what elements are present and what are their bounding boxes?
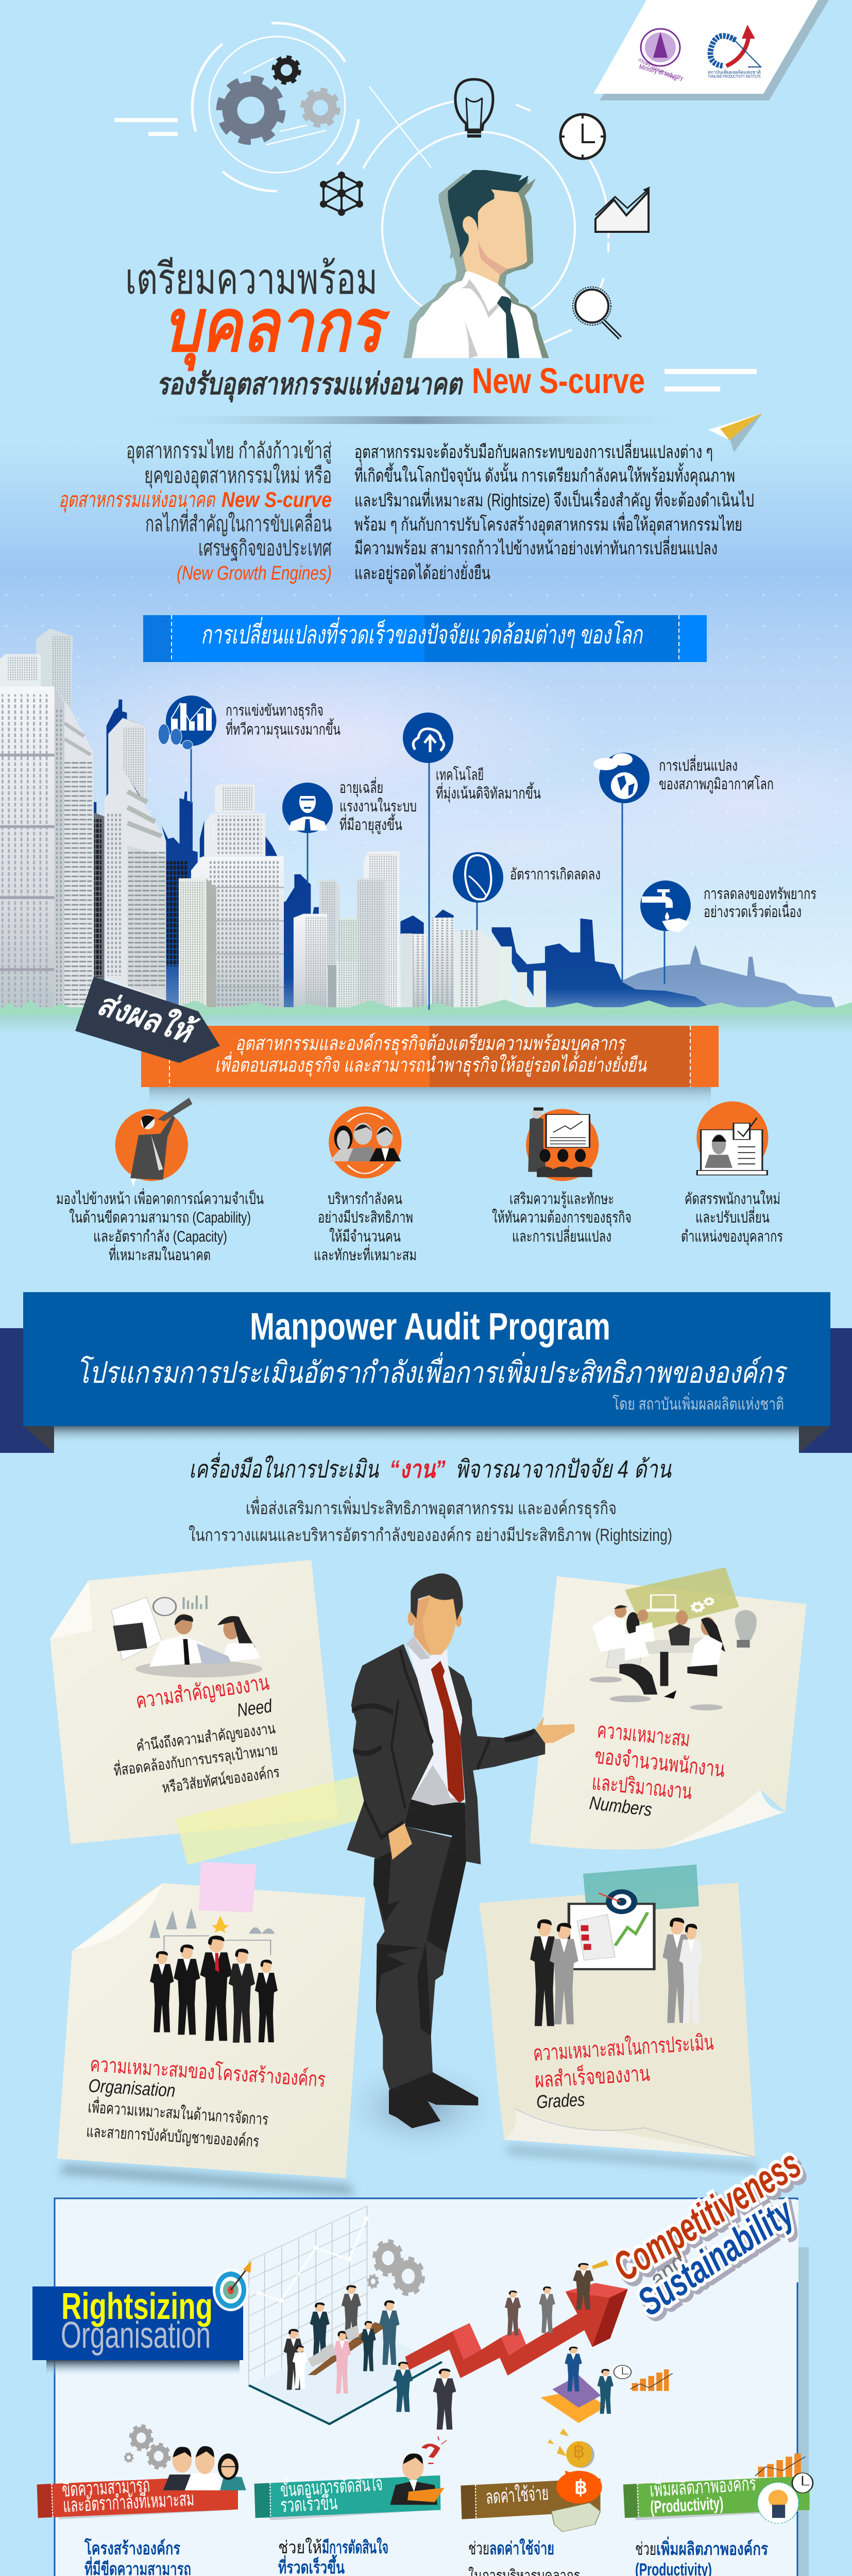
divider shadow	[124, 416, 706, 424]
callout: business competition: การแข่งขันทางธุรกิจ	[226, 702, 323, 720]
illustration: light bulb, bars and clock	[755, 2453, 813, 2523]
note text: Numbers	[588, 1718, 726, 1820]
logo panel	[593, 0, 829, 100]
person circles	[363, 101, 609, 343]
column 4 text	[635, 2536, 772, 2576]
logo: Thailand Productivity Institute: สถาบันเพิ่มผลผลิตแห่งชาติ	[708, 69, 761, 75]
title box: Rightsizing Organisation: Organisation	[61, 2315, 211, 2356]
logo: Ministry of Industry seal: Ministry of Industry	[638, 62, 684, 82]
note text: Grades: ความเหมาะสมในการประเมิน	[533, 2030, 714, 2065]
label tag: result	[75, 977, 220, 1063]
cityscape	[0, 629, 837, 1012]
strip: capability	[37, 2426, 246, 2519]
intro right text: และอยู่รอดได้อย่างยั่งยืน	[354, 561, 490, 584]
illustration: office floor and meeting	[249, 2206, 442, 2424]
title: รองรับอุตสาหกรรมแห่งอนาคต	[157, 367, 464, 403]
callout: digital technology	[403, 713, 541, 1010]
intro left text	[59, 438, 332, 584]
ribbon: Manpower Audit Program	[0, 1292, 852, 1453]
tape: pink	[199, 1862, 257, 1912]
title: New S-curve	[472, 361, 645, 401]
title box: Rightsizing Organisation: Rightsizing	[61, 2286, 213, 2327]
column 1 text: โครงสร้างองค์กร	[84, 2538, 181, 2558]
note text: Need: ที่สอดคล้องกับการบรรลุเป้าหมาย	[112, 1739, 279, 1780]
icon: growth chart	[595, 187, 650, 232]
column 2 text	[278, 2537, 417, 2576]
icon captions: และการเปลี่ยนแปลง	[512, 1226, 611, 1245]
illustration: businessman	[347, 1573, 575, 2128]
callout: ageing workforce: แรงงานในระบบ	[339, 798, 417, 815]
note text: Grades	[533, 2030, 714, 2112]
note text: Organisation: เพื่อความเหมาะสมในด้านการจัดการ	[88, 2096, 269, 2128]
strip: productivity: เพิ่มผลิตภาพองค์กร	[649, 2470, 757, 2501]
illustration: two people at a desk	[111, 1596, 262, 1677]
decorative gears circle	[114, 23, 431, 191]
illustration: piggy bank and coin: ฿	[574, 2477, 587, 2498]
note text: Organisation: ความเหมาะสมของโครงสร้างองค์กร	[89, 2053, 326, 2091]
callout: digital technology: เทคโนโลยี	[436, 766, 484, 784]
callout: birth rate: อัตราการเกิดลดลง	[510, 866, 601, 883]
callout: birth rate	[453, 852, 601, 930]
column 3 text	[468, 2538, 602, 2576]
icon: managing people	[329, 1106, 401, 1178]
banner shadow	[149, 1087, 711, 1108]
illustration: performance review	[530, 1889, 703, 2026]
illustration: man portrait	[403, 170, 549, 358]
note text: Grades: Grades	[536, 2089, 585, 2112]
icon captions: ที่เหมาะสมในอนาคต	[109, 1244, 211, 1264]
banner: global change	[143, 615, 707, 662]
icon captions: ตำแหน่งของบุคลากร	[681, 1228, 783, 1246]
callout: ageing workforce: อายุเฉลี่ย	[339, 777, 383, 798]
column 2 text: มีการตัดสินใจ	[322, 2537, 388, 2557]
icon: recruitment	[696, 1101, 768, 1175]
icon captions: อย่างมีประสิทธิภาพ	[318, 1209, 413, 1226]
callout: business competition	[158, 696, 340, 804]
tape: yellow	[176, 1775, 365, 1865]
callout: resources: อย่างรวดเร็วต่อเนื่อง	[704, 901, 802, 921]
illustration: meeting	[589, 1595, 757, 1710]
column 1 text	[83, 2538, 228, 2576]
logo: Ministry of Industry seal: กระทรวงอุตสาหกรรม	[637, 57, 678, 82]
strip: reduce costs	[461, 2429, 602, 2532]
panel: rightsizing organisation	[55, 2198, 809, 2576]
callout: digital technology: ที่มุ่งเน้นดิจิทัลมากขึ้น	[436, 782, 541, 803]
icon: orange bars	[631, 2369, 673, 2391]
note text: Need: คำนึงถึงความสำคัญของงาน	[135, 1720, 277, 1755]
icon captions: มองไปข้างหน้า เพื่อคาดการณ์ความจำเป็น	[56, 1188, 264, 1208]
icon captions: เสริมความรู้และทักษะ	[509, 1191, 614, 1208]
note text: Numbers: ความเหมาะสม	[596, 1718, 691, 1751]
heading: four factors: เครื่องมือในการประเมิน	[189, 1452, 379, 1483]
note: Numbers	[530, 1567, 806, 1850]
intro right text: อุตสาหกรรมจะต้องรับมือกับผลกระทบของการเปลี่ยนแปลงต่าง ๆ	[354, 439, 713, 463]
ground and grass	[0, 999, 852, 1033]
effect icons	[115, 1098, 768, 1187]
note: Need	[50, 1560, 338, 1844]
far skyline right	[285, 875, 837, 1011]
intro left text: อุตสาหกรรมไทย กำลังก้าวเข้าสู่	[126, 438, 332, 464]
callout: resources	[640, 880, 816, 984]
icon: clock	[560, 114, 605, 159]
column 3 text: ลดค่าใช้จ่าย	[489, 2538, 554, 2558]
illustration: piggy bank and coin: ฿	[573, 2440, 585, 2462]
heading: four factors: ในการวางแผนและบริหารอัตรากำลังขององค์กร อย่างมีประสิทธิภาพ (Rightsizing)	[189, 1525, 672, 1545]
feet shadow	[332, 2056, 507, 2159]
illustration: three people and gears	[124, 2426, 246, 2490]
ribbon: Manpower Audit Program: Manpower Audit Program	[250, 1305, 610, 1348]
logo: Thailand Productivity Institute	[708, 25, 761, 79]
strip: faster decisions: รวดเร็วขึ้น	[280, 2488, 338, 2517]
intro left text: อุตสาหกรรมแห่งอนาคต	[59, 487, 216, 513]
intro left text: ยุคของอุตสาหกรรมใหม่ หรือ	[144, 463, 332, 489]
icon: magnifier	[573, 287, 620, 338]
note text: Numbers: Numbers	[588, 1792, 653, 1820]
note: Organisation	[57, 1862, 365, 2195]
note: Grades	[479, 1865, 757, 2172]
illustration: thinking manager	[390, 2436, 447, 2505]
callout: climate change	[593, 753, 774, 981]
heading: Competitiveness and Sustainability: and	[643, 2247, 692, 2294]
banner: effect statement: เพื่อตอบสนองธุรกิจ และสามารถนำพาธุรกิจให้อยู่รอดได้อย่างยั่งยืน	[215, 1051, 647, 1077]
title	[125, 255, 757, 403]
note text: Organisation: Organisation	[88, 2075, 176, 2101]
tape: teal	[583, 1865, 699, 1914]
icon captions	[56, 1188, 783, 1264]
ribbon: Manpower Audit Program: โดย สถาบันเพิ่มผลผลิตแห่งชาติ	[612, 1393, 784, 1413]
icon: grey gear	[302, 90, 338, 126]
intro left text: เศรษฐกิจของประเทศ	[198, 536, 332, 561]
logo: Ministry of Industry seal	[637, 29, 684, 82]
icon captions: ในด้านขีดความสามารถ (Capability)	[69, 1209, 251, 1226]
illustration: red growth arrow	[393, 2260, 631, 2430]
banner: effect statement: อุตสาหกรรมและองค์กรธุรกิจต้องเตรียมความพร้อมบุคลากร	[235, 1032, 627, 1055]
strip: faster decisions: ขั้นตอนการตัดสินใจ	[279, 2469, 383, 2501]
icon: network cube	[321, 173, 362, 215]
near buildings left	[0, 629, 413, 1012]
icon: looking ahead	[115, 1098, 192, 1187]
callout: climate change: การเปลี่ยนแปลง	[659, 755, 738, 774]
note text: Need	[112, 1670, 281, 1797]
strip: productivity: (Productivity)	[650, 2494, 724, 2517]
icon: training	[526, 1107, 599, 1181]
icon captions: ให้มีจำนวนคน	[329, 1228, 401, 1245]
note text: Need: หรือวิสัยทัศน์ขององค์กร	[161, 1764, 281, 1797]
strip: reduce costs: ลดค่าใช้จ่าย	[485, 2482, 549, 2509]
illustration: organisation team	[149, 1908, 278, 2043]
intro left text: (New Growth Engines)	[177, 563, 332, 584]
strip: faster decisions	[254, 2436, 447, 2520]
icon: large gear	[219, 79, 282, 142]
note text: Numbers: ของจำนวนพนักงาน	[593, 1743, 726, 1782]
callout: ageing workforce: ที่มีอายุสูงขึ้น	[339, 814, 402, 835]
column 4 text: เพิ่มผลิตภาพองค์กร	[656, 2536, 769, 2559]
icon captions: บริหารกำลังคน	[328, 1191, 402, 1208]
icon: target	[213, 2261, 251, 2311]
intro left text: กลไกที่สำคัญในการขับเคลื่อน	[145, 509, 332, 536]
sky and clouds background	[0, 443, 852, 1025]
heading: four factors: พิจารณาจากปัจจัย 4 ด้าน	[455, 1456, 672, 1483]
intro left text: New S-curve	[221, 487, 332, 512]
intro right text: มีความพร้อม สามารถก้าวไปข้างหน้าอย่างเท่าทันการเปลี่ยนแปลง	[354, 536, 718, 558]
icon: paper plane	[708, 413, 762, 452]
note text: Grades: ผลสำเร็จของงาน	[534, 2060, 651, 2092]
strip: productivity	[623, 2453, 813, 2523]
icon captions: และอัตรากำลัง (Capacity)	[93, 1228, 227, 1245]
icon: black gear	[273, 57, 300, 83]
banner: global change: การเปลี่ยนแปลงที่รวดเร็วของปัจจัยแวดล้อมต่างๆ ของโลก	[201, 617, 643, 649]
note text: Organisation: และสายการบังคับบัญชาขององค์กร	[86, 2122, 260, 2150]
icon captions: และปรับเปลี่ยน	[695, 1207, 770, 1226]
column 2 text: ช่วยให้	[278, 2537, 322, 2557]
illustration: piggy bank and coin	[548, 2429, 602, 2532]
icon captions: ให้ทันความต้องการของธุรกิจ	[492, 1209, 632, 1227]
label tag: result: ส่งผลให้	[93, 985, 202, 1052]
column 3 text: ช่วย	[468, 2539, 489, 2558]
title box: Rightsizing Organisation	[32, 2261, 251, 2376]
column 4 text: ช่วย	[635, 2539, 656, 2559]
callout: climate change: ของสภาพภูมิอากาศโลก	[659, 775, 774, 793]
strip: capability: ขีดความสามารถ	[61, 2475, 150, 2501]
heading: four factors	[189, 1452, 672, 1545]
note text: Numbers: และปริมาณงาน	[591, 1770, 693, 1804]
strip: capability: และอัตรากำลังที่เหมาะสม	[62, 2485, 195, 2517]
intro right text	[354, 439, 754, 584]
callout: business competition: ที่ทวีความรุนแรงมากขึ้น	[226, 718, 340, 739]
logo: Thailand Productivity Institute: THAILAND PRODUCTIVITY INSTITUTE	[708, 74, 761, 79]
note text: Organisation	[86, 2053, 326, 2150]
note text: Need: Need	[235, 1695, 274, 1721]
icon captions: และทักษะที่เหมาะสม	[314, 1244, 417, 1264]
title: เตรียมความพร้อม	[125, 255, 378, 303]
title: บุคลากร	[163, 285, 390, 371]
banner: effect statement	[141, 1026, 719, 1087]
heading: four factors: “งาน”	[389, 1456, 446, 1483]
heading: four factors: เพื่อส่งเสริมการเพิ่มประสิทธิภาพอุตสาหกรรม และองค์กรธุรกิจ	[246, 1496, 617, 1519]
note text: Need: ความสำคัญของงาน	[134, 1670, 271, 1714]
callout: ageing workforce	[282, 777, 417, 884]
icon captions: คัดสรรพนักงานใหม่	[685, 1190, 780, 1208]
icon: light bulb	[455, 79, 493, 136]
